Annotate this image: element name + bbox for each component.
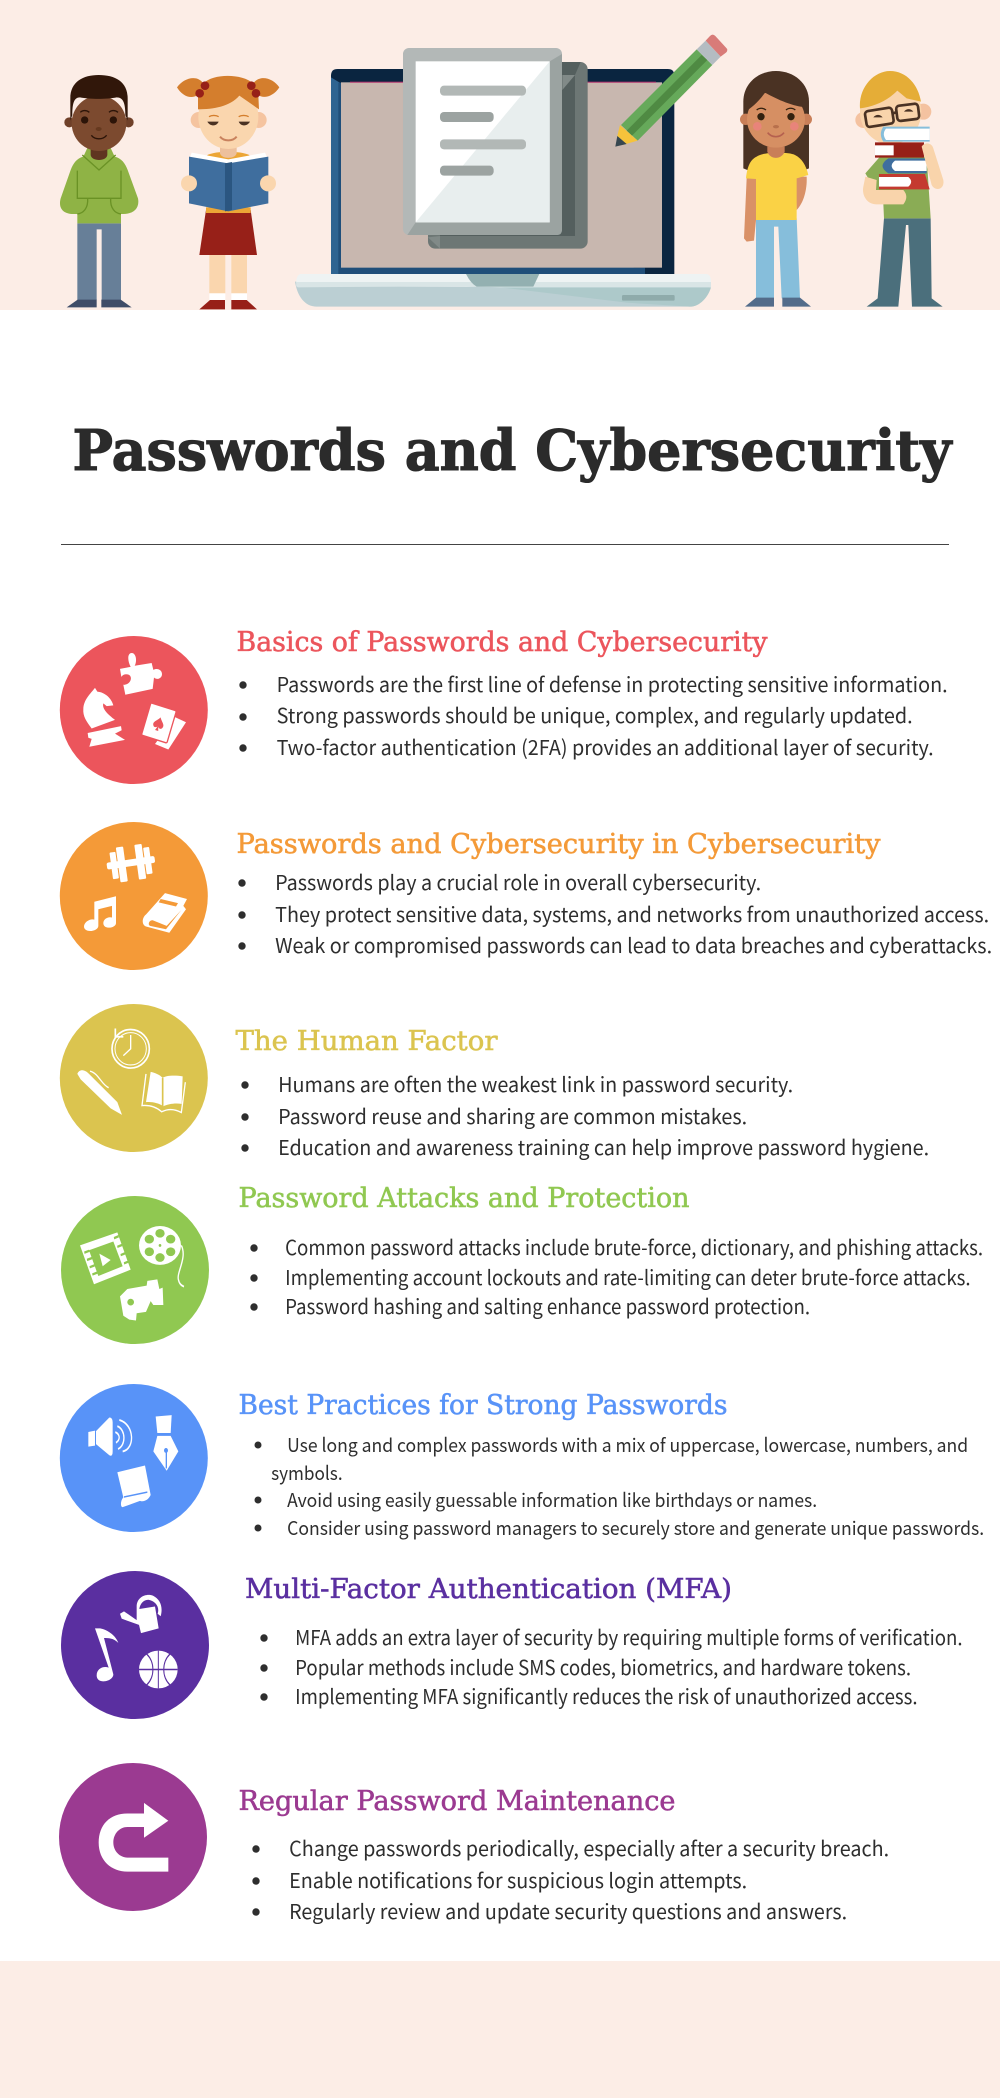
bullet list: Popular methods include SMS codes, biometrics, and hardware tokens.: [295, 1651, 911, 1681]
bullet list: Enable notifications for suspicious login attempts.: [289, 1864, 747, 1894]
heading: Multi-Factor Authentication (MFA): [245, 1574, 732, 1605]
bullet list: Password hashing and salting enhance password protection.: [285, 1290, 810, 1320]
bullet list: Use long and complex passwords with a mix of uppercase, lowercase, numbers, and: [287, 1431, 968, 1458]
heading: Passwords and Cybersecurity in Cybersecurity: [236, 829, 881, 860]
pencil: [615, 35, 727, 147]
heading: Best Practices for Strong Passwords: [238, 1390, 728, 1421]
icon: dumbbell, music notes, book: [60, 822, 208, 970]
footer band: [0, 1961, 1000, 2098]
heading: Regular Password Maintenance: [238, 1786, 676, 1817]
bullet list: [260, 1621, 963, 1710]
bullet list: Password reuse and sharing are common mistakes.: [278, 1100, 747, 1130]
bullet list: [238, 866, 992, 959]
boy with stack of books: [855, 71, 944, 307]
icon: film strip, film reel, camera: [61, 1196, 209, 1344]
heading: Basics of Passwords and Cybersecurity: [236, 627, 768, 658]
icon: clock, pen, open book: [60, 1004, 208, 1152]
section: passwords in cybersecurity: [60, 822, 992, 970]
icon: music note, watering can, basketball: [61, 1571, 209, 1719]
bullet list: Education and awareness training can help improve password hygiene.: [278, 1131, 929, 1161]
girl reading a book: [177, 76, 279, 309]
section: regular password maintenance: [59, 1763, 889, 1925]
bullet list: [239, 668, 948, 761]
section: the human factor: [60, 1004, 929, 1161]
laptop: [295, 69, 711, 307]
front document: [403, 48, 562, 235]
title: Passwords and Cybersecurity: [72, 418, 953, 484]
bullet list: [252, 1832, 889, 1925]
bullet list: Avoid using easily guessable information like birthdays or names.: [287, 1486, 817, 1513]
icon: speaker, fountain pen nib, scroll: [60, 1384, 208, 1532]
bullet list: Two-factor authentication (2FA) provides an additional layer of security.: [277, 731, 934, 761]
bullet list: Strong passwords should be unique, complex, and regularly updated.: [277, 699, 913, 729]
bullet list: Regularly review and update security questions and answers.: [289, 1895, 847, 1925]
back document: [428, 62, 588, 249]
bullet list: Implementing MFA significantly reduces the risk of unauthorized access.: [295, 1680, 918, 1710]
header illustration band: [0, 0, 1000, 310]
section: multi-factor authentication: [61, 1571, 963, 1719]
bullet list: Weak or compromised passwords can lead to data breaches and cyberattacks.: [275, 929, 992, 959]
section: basics of passwords: [60, 627, 948, 784]
bullet list: [241, 1068, 929, 1161]
section: best practices for strong passwords: [60, 1384, 984, 1541]
boy in green hoodie: [60, 75, 138, 307]
heading: Password Attacks and Protection: [238, 1183, 690, 1214]
section: password attacks and protection: [61, 1183, 983, 1344]
bullet list: [254, 1431, 984, 1541]
icon: u-turn arrow: [59, 1763, 207, 1911]
icon: puzzle, chess knight, cards: [60, 636, 208, 784]
heading: The Human Factor: [236, 1026, 498, 1057]
bullet list: symbols.: [271, 1459, 343, 1486]
bullet list: Passwords are the first line of defense in protecting sensitive information.: [277, 668, 948, 698]
girl in yellow shirt: [740, 71, 812, 307]
bullet list: Change passwords periodically, especially after a security breach.: [289, 1832, 889, 1862]
bullet list: [250, 1231, 983, 1320]
bullet list: They protect sensitive data, systems, and networks from unauthorized access.: [275, 898, 989, 928]
bullet list: Humans are often the weakest link in password security.: [278, 1068, 793, 1098]
bullet list: Passwords play a crucial role in overall cybersecurity.: [275, 866, 761, 896]
